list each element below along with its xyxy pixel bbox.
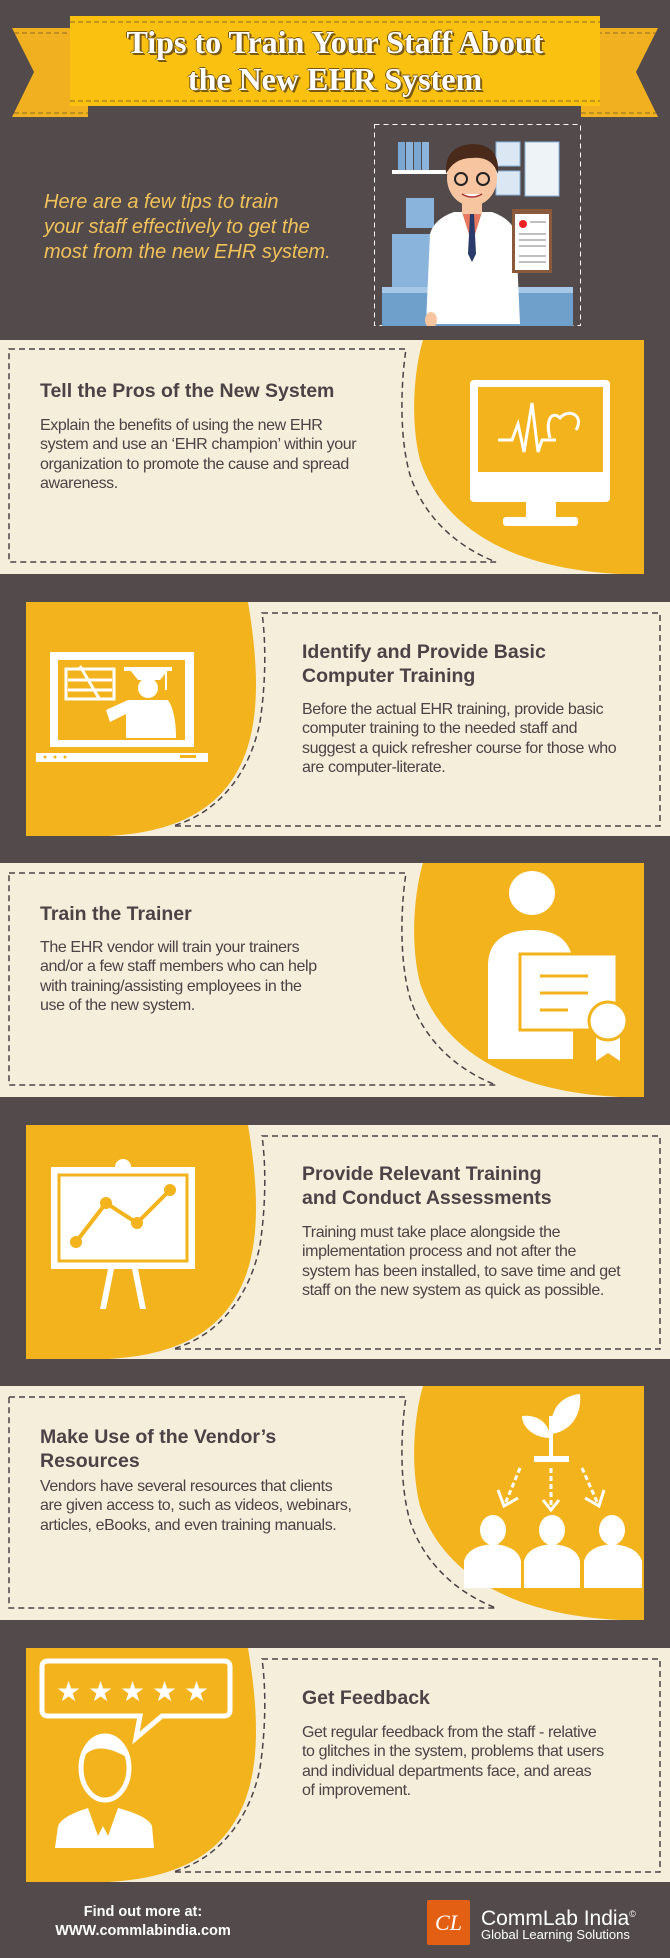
body text: suggest a quick refresher course for those who [302, 740, 616, 757]
body text [302, 1224, 621, 1299]
body text: Vendors have several resources that clients [40, 1478, 332, 1495]
icon: doctor illustration [374, 124, 581, 326]
body text: Explain the benefits of using the new EHR [40, 417, 322, 434]
body text [40, 1478, 352, 1534]
icon: trainer with certificate [488, 871, 627, 1061]
title text: Tips to Train Your Staff About [126, 24, 544, 60]
body text: system has been installed, to save time and get [302, 1263, 620, 1280]
icon: rating bubble and person: ★ [184, 1675, 209, 1708]
body text: organization to promote the cause and spread [40, 456, 349, 473]
body text: and/or a few staff members who can help [40, 958, 317, 975]
heading: Train the Trainer [40, 903, 192, 925]
icon: training screen [36, 652, 208, 762]
icon: rating bubble and person: ★ [120, 1675, 145, 1708]
heading: Computer Training [302, 665, 475, 687]
body text: with training/assisting employees in the [40, 978, 301, 995]
body text: The EHR vendor will train your trainers [40, 939, 299, 956]
body text: are given access to, such as videos, webinars, [40, 1497, 352, 1514]
panel: basic computer training [26, 602, 670, 836]
body text: and individual departments face, and areas [302, 1763, 591, 1780]
heading: and Conduct Assessments [302, 1187, 552, 1209]
heading [302, 1163, 552, 1209]
panel: tell the pros [0, 340, 644, 574]
body text [302, 1724, 604, 1799]
icon: CL logo [427, 1900, 470, 1945]
footer: logo: Global Learning Solutions [481, 1927, 630, 1942]
body text [40, 939, 317, 1014]
icon: monitor heartbeat [470, 380, 610, 526]
body text: articles, eBooks, and even training manuals. [40, 1517, 336, 1534]
panel: relevant training [26, 1125, 670, 1359]
title text [126, 24, 546, 99]
body text: system and use an ‘EHR champion’ within your [40, 436, 356, 453]
icon: CL logo: CL [435, 1910, 462, 1935]
icon: rating bubble and person [42, 1661, 230, 1848]
heading: Get Feedback [302, 1687, 430, 1709]
title banner [12, 16, 658, 117]
panel: get feedback [26, 1648, 670, 1882]
panel: vendor resources [0, 1386, 644, 1620]
icon: easel chart [51, 1159, 195, 1309]
footer: logo: CommLab India© [481, 1907, 636, 1930]
heading: Tell the Pros of the New System [40, 380, 334, 402]
heading: Make Use of the Vendor’s [40, 1426, 276, 1448]
intro text: Here are a few tips to train [44, 191, 279, 213]
footer: find out more: WWW.commlabindia.com [55, 1923, 231, 1939]
panel: train the trainer [0, 863, 644, 1097]
footer: logo [427, 1900, 636, 1945]
body text: Training must take place alongside the [302, 1224, 560, 1241]
heading: Resources [40, 1450, 140, 1472]
icon: rating bubble and person: ★ [152, 1675, 177, 1708]
body text: of improvement. [302, 1782, 411, 1799]
heading: Identify and Provide Basic [302, 641, 546, 663]
title text: the New EHR System [188, 61, 482, 97]
icon: sprout and people [464, 1394, 642, 1588]
intro text: your staff effectively to get the [44, 216, 310, 238]
footer: find out more: Find out more at: [84, 1904, 202, 1920]
icon: rating bubble and person: ★ [88, 1675, 113, 1708]
body text: to glitches in the system, problems that users [302, 1743, 604, 1760]
body text [302, 701, 616, 776]
footer: find out more [55, 1904, 231, 1939]
body text: Get regular feedback from the staff - relative [302, 1724, 596, 1741]
body text: implementation process and not after the [302, 1243, 576, 1260]
heading [40, 1426, 276, 1472]
intro text [42, 191, 331, 263]
heading: Provide Relevant Training [302, 1163, 541, 1185]
heading [302, 641, 546, 687]
body text: computer training to the needed staff and [302, 720, 577, 737]
body text: Before the actual EHR training, provide basic [302, 701, 603, 718]
body text: use of the new system. [40, 997, 195, 1014]
body text: awareness. [40, 475, 118, 492]
body text: staff on the new system as quick as possible. [302, 1282, 604, 1299]
body text [40, 417, 356, 492]
icon: rating bubble and person: ★ [56, 1675, 81, 1708]
intro text: most from the new EHR system. [44, 241, 331, 263]
body text: are computer-literate. [302, 759, 445, 776]
